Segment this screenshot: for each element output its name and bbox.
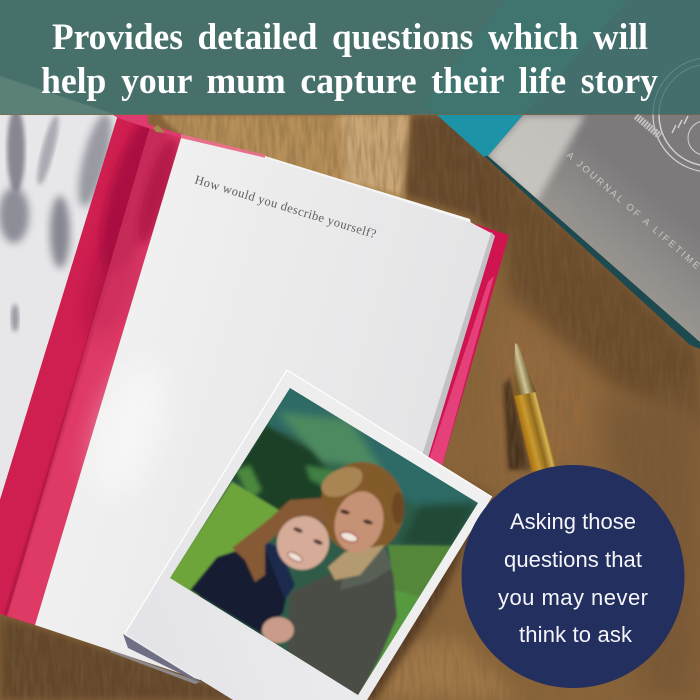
grass meadow right — [387, 544, 452, 598]
girl face — [274, 514, 332, 572]
red cover and gutter — [0, 102, 186, 625]
title: help your mum capture their life story — [41, 61, 658, 102]
callout text: questions that — [504, 547, 642, 572]
callout text: think to ask — [519, 622, 633, 647]
header clock emblem — [653, 58, 700, 114]
polaroid bright edge — [125, 370, 492, 633]
journal book: teal cover — [437, 114, 700, 349]
pen — [514, 343, 556, 472]
leaf shadow on page — [159, 172, 185, 228]
polaroid image — [160, 380, 485, 700]
grass meadow left — [170, 481, 280, 596]
header band — [0, 0, 700, 114]
left page — [0, 115, 118, 500]
photo backdrop — [174, 388, 478, 670]
girl hair — [232, 498, 335, 582]
journal spine light — [488, 115, 585, 205]
header teal tint of book — [423, 0, 628, 114]
mother hair — [317, 461, 404, 554]
far hills — [267, 388, 478, 514]
red cover top fold — [113, 115, 181, 138]
red endpaper top strip — [181, 134, 266, 159]
mother jacket — [286, 570, 398, 695]
mother hair lock — [328, 545, 385, 580]
page underside — [110, 650, 200, 684]
journal grey cover — [488, 115, 700, 342]
header left page tint — [0, 76, 115, 114]
polaroid photo — [123, 370, 492, 700]
mother face — [333, 490, 385, 553]
hand — [262, 617, 294, 643]
clock emblem — [636, 58, 700, 172]
polaroid card — [125, 370, 492, 700]
callout text — [498, 509, 648, 647]
title — [41, 17, 658, 102]
girl jacket — [190, 549, 286, 634]
callout circle — [462, 465, 684, 688]
left page leaf shadow — [0, 108, 118, 332]
callout text: Asking those — [510, 509, 636, 534]
lit cover strip — [428, 276, 494, 470]
open book — [0, 102, 509, 684]
pen tip — [514, 343, 536, 396]
callout text: you may never — [498, 585, 648, 610]
journal title: A JOURNAL OF A LIFETIME — [564, 150, 700, 272]
white page stack strip — [265, 156, 472, 228]
question text: How would you describe yourself? — [193, 172, 378, 241]
soft light on right page — [81, 354, 179, 506]
dark forest — [232, 424, 327, 510]
polaroid shadow edge — [123, 634, 204, 684]
cover right corner — [420, 223, 509, 470]
title: Provides detailed questions which will — [52, 17, 648, 58]
gold clip — [153, 125, 165, 133]
right page — [35, 138, 491, 680]
page edges — [418, 232, 495, 465]
